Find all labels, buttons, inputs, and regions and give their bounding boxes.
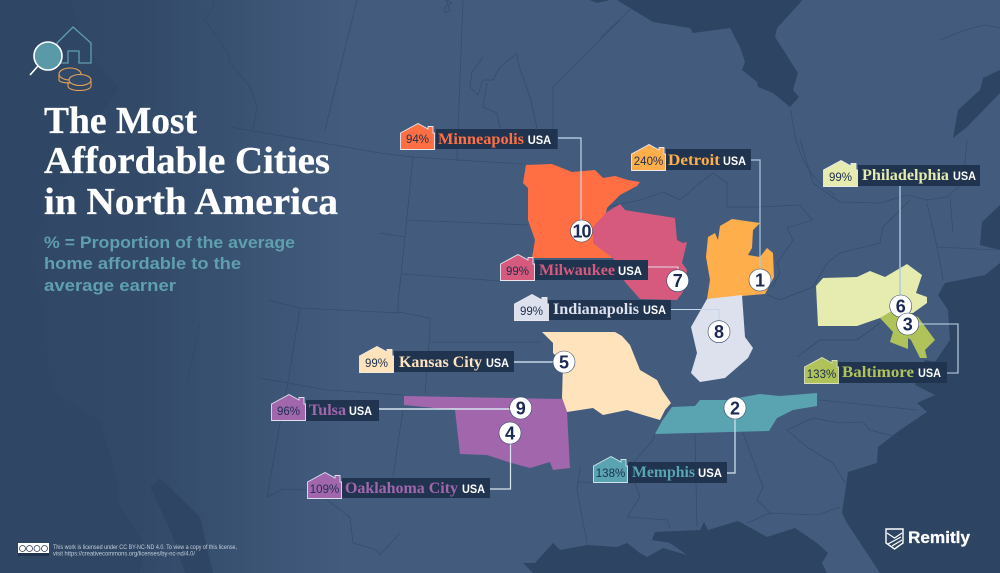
- marker 7: 7: [673, 271, 683, 291]
- state: Oklahoma: [404, 396, 570, 470]
- marker 5: 5: [559, 352, 569, 372]
- marker 5: [553, 351, 575, 373]
- label: Memphis: [594, 456, 727, 483]
- marker 3: [897, 313, 919, 335]
- state: Tennessee: [655, 393, 817, 434]
- title: [44, 100, 338, 223]
- marker 4: 4: [505, 424, 515, 444]
- label: Oaklahoma City: [308, 472, 490, 498]
- label: Kansas City: Kansas City: [399, 354, 482, 371]
- title: Affordable Cities: [44, 140, 330, 182]
- label: Detroit: 240%: [634, 156, 663, 168]
- marker 7: [667, 270, 689, 292]
- title: The Most: [44, 100, 197, 142]
- connector: Milwaukee: [648, 267, 678, 272]
- label: Tulsa: USA: [349, 404, 372, 418]
- connector: Philadelphia: [899, 186, 901, 298]
- state: Michigan: [706, 219, 774, 299]
- label: Indianapolis: 99%: [520, 306, 543, 318]
- logo: Remitly: [886, 528, 971, 549]
- logo: Remitly: Remitly: [908, 528, 971, 547]
- marker 6: [890, 295, 912, 317]
- label: Indianapolis: [514, 294, 671, 320]
- marker 9: [510, 397, 532, 419]
- connector: Baltimore: [916, 324, 958, 373]
- label: Detroit: USA: [723, 154, 746, 168]
- marker 4: [499, 422, 521, 444]
- label: Oaklahoma City: 109%: [310, 484, 339, 496]
- marker 8: 8: [714, 322, 724, 342]
- marker 1: 1: [755, 270, 765, 290]
- label: Philadelphia: 99%: [829, 172, 852, 184]
- connector: Detroit: [751, 160, 760, 272]
- label: Tulsa: 96%: [277, 406, 300, 418]
- state: Maryland: [880, 312, 935, 358]
- label: Philadelphia: Philadelphia: [862, 167, 949, 184]
- connector: Kansas City: [514, 361, 556, 363]
- label: Kansas City: USA: [486, 356, 509, 370]
- state: Minnesota: [523, 164, 640, 258]
- connector: Minneapolis: [558, 138, 581, 222]
- label: Oaklahoma City: USA: [462, 482, 485, 496]
- label: Tulsa: [272, 394, 379, 421]
- icon: house, magnifier and coins: [30, 27, 91, 90]
- state: Wisconsin: [593, 204, 687, 300]
- subtitle: home affordable to the: [44, 254, 241, 273]
- state: Pennsylvania: [816, 264, 927, 326]
- label: Indianapolis: USA: [643, 303, 666, 317]
- state: Indiana: [691, 295, 753, 382]
- marker 8: [708, 321, 730, 343]
- title: in North America: [44, 181, 338, 223]
- label: Milwaukee: Milwaukee: [539, 262, 615, 279]
- map: state and province borders: [187, 0, 1000, 555]
- marker 2: [724, 397, 746, 419]
- label: Detroit: [632, 144, 751, 170]
- marker 9: 9: [516, 398, 526, 418]
- subtitle: [44, 233, 295, 295]
- label: Tulsa: Tulsa: [309, 402, 346, 419]
- label: Memphis: USA: [698, 466, 722, 480]
- marker 1: [749, 269, 771, 291]
- label: Baltimore: Baltimore: [842, 364, 914, 381]
- license badge: [18, 543, 49, 556]
- label: Baltimore: USA: [918, 366, 941, 380]
- label: Minneapolis: Minneapolis: [438, 131, 524, 148]
- state: Missouri: [542, 332, 671, 420]
- license text: visit https://creativecommons.org/licenses/by-nc-nd/4.0/: [53, 550, 195, 558]
- subtitle: average earner: [44, 276, 176, 295]
- connector: Tulsa: [379, 408, 512, 410]
- connector: Memphis: [727, 417, 735, 473]
- connector: Indianapolis: [671, 310, 719, 322]
- label: Kansas City: 99%: [365, 358, 388, 370]
- label: Philadelphia: USA: [953, 169, 976, 183]
- label: Milwaukee: [500, 254, 648, 280]
- label: Milwaukee: 99%: [506, 266, 529, 278]
- left gradient overlay: [0, 0, 345, 573]
- label: Indianapolis: Indianapolis: [553, 301, 639, 318]
- label: Minneapolis: [400, 124, 558, 150]
- label: Philadelphia: [824, 160, 980, 186]
- label: Oaklahoma City: Oaklahoma City: [345, 480, 458, 497]
- marker 2: 2: [730, 398, 740, 418]
- marker 10: 10: [572, 222, 591, 242]
- license text: This work is licensed under CC BY-NC-ND 4.0. To view a copy of this license,: [53, 544, 237, 551]
- label: Baltimore: [804, 358, 947, 384]
- marker 6: 6: [896, 296, 906, 316]
- label: Memphis: 138%: [596, 468, 625, 480]
- label: Milwaukee: USA: [618, 264, 642, 278]
- label: Minneapolis: 94%: [406, 134, 429, 146]
- label: Baltimore: 133%: [807, 369, 836, 381]
- label: Memphis: Memphis: [632, 464, 695, 481]
- label: Minneapolis: USA: [528, 133, 552, 147]
- connector: Oklahoma City: [490, 442, 510, 489]
- marker 3: 3: [903, 314, 913, 334]
- label: Detroit: Detroit: [668, 152, 721, 169]
- license text: [53, 544, 237, 558]
- label: Kansas City: [360, 346, 514, 372]
- subtitle: % = Proportion of the average: [44, 233, 295, 252]
